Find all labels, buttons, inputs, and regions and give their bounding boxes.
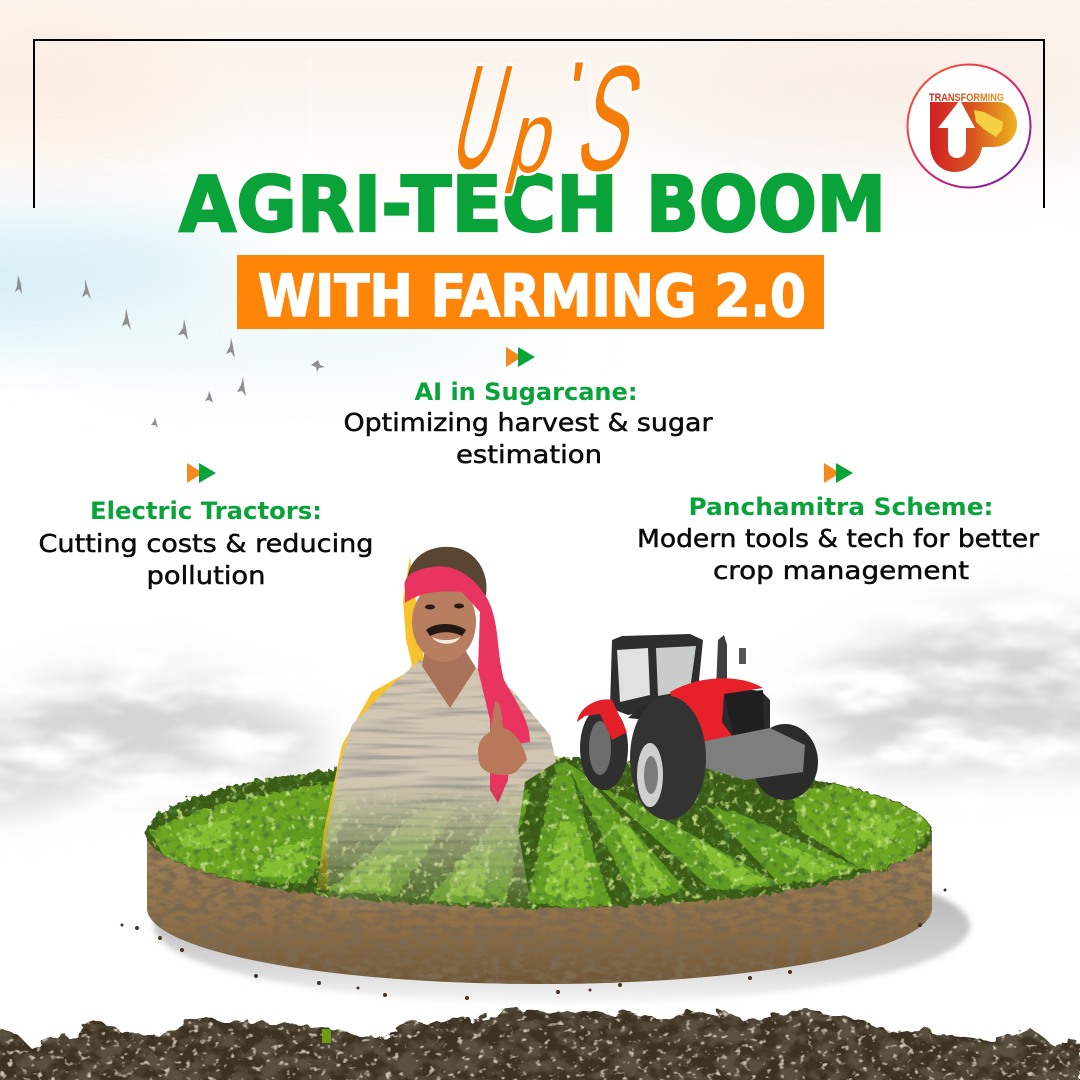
orange letters: p <box>499 81 569 194</box>
red fender <box>577 699 627 740</box>
point: AI in Sugarcane: AI in Sugarcane: <box>414 378 638 406</box>
farmer <box>317 547 556 910</box>
icon: double arrow <box>187 463 216 483</box>
white halo: U <box>439 35 525 200</box>
far wheel <box>752 724 818 800</box>
orange letters: ' <box>560 45 590 140</box>
disc shadow <box>154 848 970 1004</box>
logo: Transforming UP <box>908 64 1030 188</box>
white halo: p <box>499 81 569 194</box>
icon: double arrow <box>824 463 853 483</box>
engine body <box>628 688 770 760</box>
rear wheel <box>580 706 628 790</box>
point: Panchamitra Scheme: crop management <box>713 556 969 585</box>
clouds <box>0 608 1080 815</box>
red hood <box>670 678 763 746</box>
neck <box>422 650 476 708</box>
orange letters: U <box>439 35 525 200</box>
farm disc <box>146 758 970 1004</box>
soil side <box>147 830 932 984</box>
birds <box>15 275 325 428</box>
point: Panchamitra Scheme: Panchamitra Scheme: <box>688 493 994 521</box>
crop field <box>146 758 935 908</box>
moustache and smile <box>426 624 466 636</box>
point: Electric Tractors: Electric Tractors: <box>90 497 322 525</box>
front wheel <box>630 696 706 820</box>
grey front weight <box>700 728 805 780</box>
yellow cut-out outline <box>317 556 425 890</box>
face <box>412 591 476 662</box>
title: script Up's <box>439 34 658 202</box>
frame line <box>34 40 1044 208</box>
exhaust and mirror <box>716 635 727 690</box>
white halo: S <box>564 34 658 202</box>
point: Electric Tractors <box>38 463 374 590</box>
red headband and scarf <box>404 566 530 803</box>
orange letters <box>439 34 658 202</box>
title: AGRI-TECH BOOM: BOOM <box>646 161 886 250</box>
point: AI in Sugarcane <box>344 347 713 469</box>
title: AGRI-TECH BOOM <box>179 161 886 250</box>
seedling <box>322 1029 331 1043</box>
white halo: ' <box>560 45 590 140</box>
point: Panchamitra Scheme: Modern tools & tech for better <box>637 524 1040 553</box>
cab <box>610 634 703 715</box>
logo: Transforming UP: TRANSFORMING <box>929 92 1004 104</box>
point: Panchamitra Scheme <box>637 463 1040 585</box>
scattered soil specks <box>120 888 946 1000</box>
eyes <box>425 604 464 610</box>
bottom soil strip <box>0 1008 1080 1080</box>
hair <box>407 547 487 596</box>
white halo <box>439 34 658 202</box>
title: AGRI-TECH BOOM: AGRI-TECH <box>179 161 618 250</box>
thumbs up hand <box>478 701 527 775</box>
orange letters: S <box>564 34 658 202</box>
point: Electric Tractors: Cutting costs & reducing <box>38 529 374 558</box>
kurta <box>326 660 556 910</box>
point: AI in Sugarcane: estimation <box>456 440 602 469</box>
point: Electric Tractors: pollution <box>146 561 266 590</box>
subtitle banner: WITH FARMING 2.0 <box>258 262 806 330</box>
icon: double arrow <box>506 347 535 367</box>
point: AI in Sugarcane: Optimizing harvest & sugar <box>344 408 713 437</box>
tractor <box>577 634 818 820</box>
